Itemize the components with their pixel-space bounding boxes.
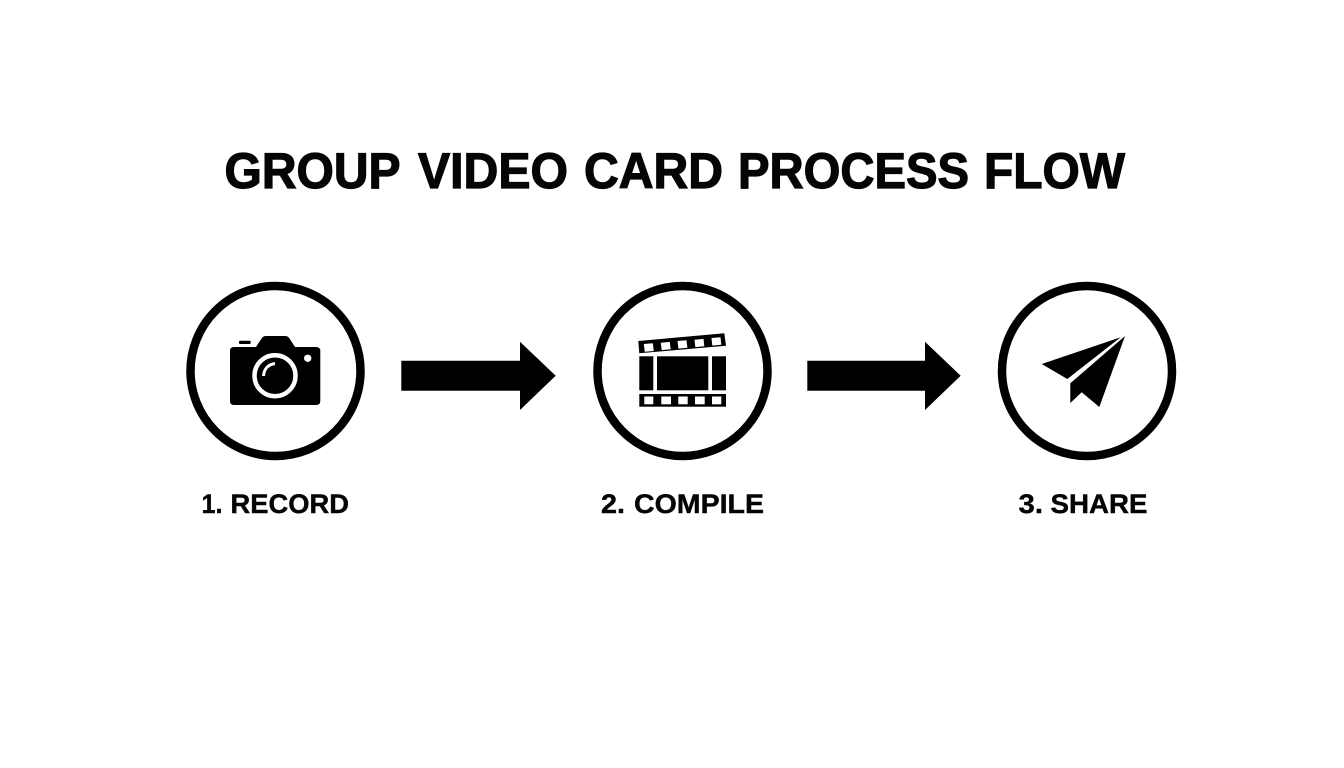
icon circle: record bbox=[190, 286, 360, 456]
label: compile: COMPILE bbox=[634, 489, 764, 519]
label: record: RECORD bbox=[230, 489, 349, 519]
title: CARD bbox=[584, 143, 723, 199]
title bbox=[224, 143, 1126, 199]
label: share: 3. bbox=[1018, 489, 1043, 519]
title: FLOW bbox=[984, 143, 1126, 199]
label: record: 1. bbox=[202, 489, 222, 519]
step 1: record bbox=[190, 286, 360, 519]
title: VIDEO bbox=[418, 143, 568, 199]
step 2: compile bbox=[598, 286, 768, 519]
icon: film clapper bbox=[638, 333, 726, 407]
arrow: record to compile bbox=[401, 342, 556, 410]
title: PROCESS bbox=[738, 143, 969, 199]
arrow: compile to share bbox=[807, 342, 961, 410]
icon circle: compile bbox=[598, 286, 768, 456]
step 3: share bbox=[1002, 286, 1172, 519]
label: share: SHARE bbox=[1050, 489, 1148, 519]
icon circle: share bbox=[1002, 286, 1172, 456]
icon: camera bbox=[230, 336, 320, 405]
title: GROUP bbox=[224, 143, 400, 199]
label: compile: 2. bbox=[601, 489, 625, 519]
icon: paper plane bbox=[1042, 336, 1125, 407]
